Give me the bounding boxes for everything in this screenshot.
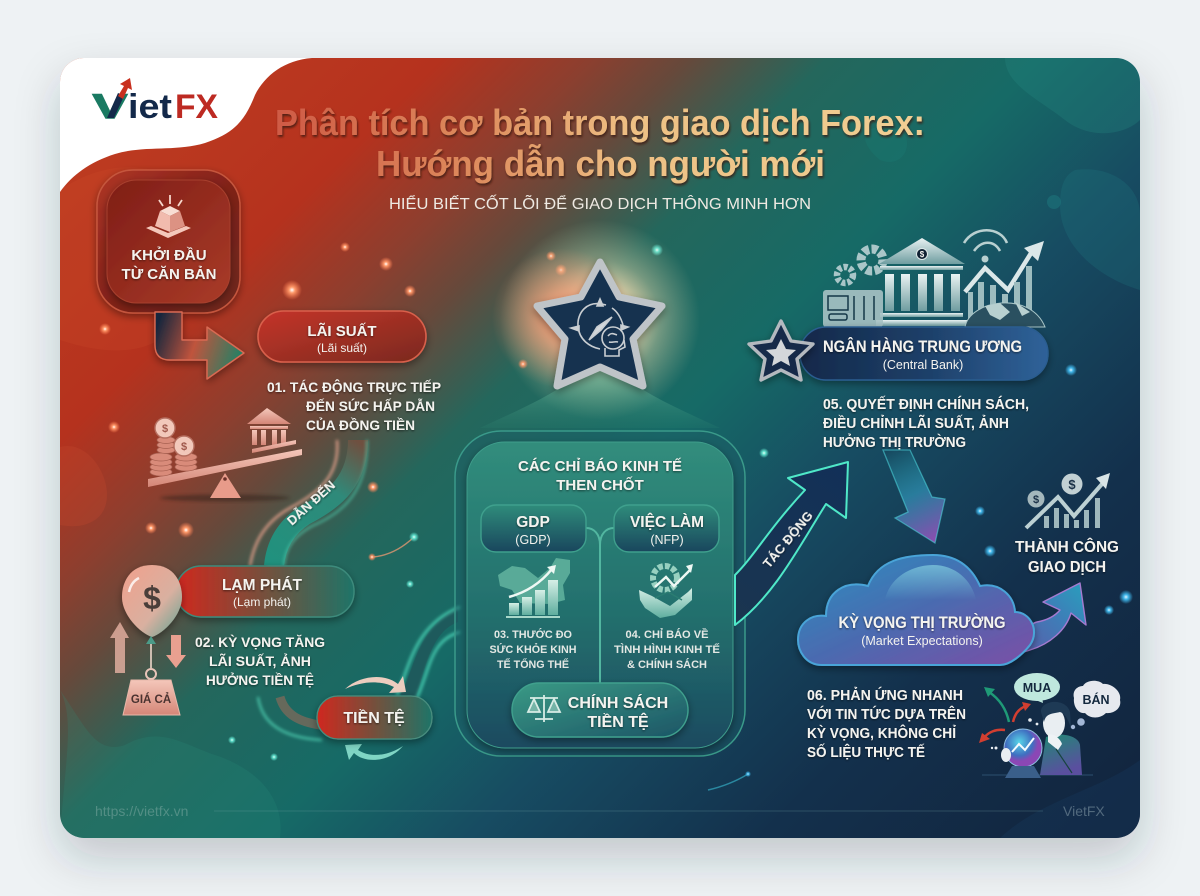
cloud: market expectations: (Market Expectations) (861, 634, 983, 648)
text: thành công giao dịch: GIAO DỊCH (1028, 559, 1106, 576)
pill: chính sách tiền tệ (512, 683, 688, 737)
icon: wifi (964, 230, 1007, 262)
icon: trading success chart (1026, 473, 1110, 528)
bubble: bán: BÁN (1082, 692, 1110, 707)
footer: divider (214, 810, 1043, 812)
icon: central bank, gears, chart, globe (823, 230, 1045, 327)
icon: central bank, gears, chart, globe: $ (920, 250, 925, 259)
text 02 (195, 633, 325, 688)
box: việc làm: (NFP) (650, 533, 684, 547)
icon: gears (837, 249, 883, 283)
text 03 (490, 628, 577, 671)
arrow: start to lãi suất (155, 312, 244, 379)
cloud: market expectations: KỲ VỌNG THỊ TRƯỜNG (838, 613, 1006, 632)
text 01 (267, 378, 441, 433)
title (275, 102, 925, 184)
star glow and cone (480, 220, 720, 428)
icon: seesaw with coins and bank (148, 408, 302, 502)
pill: tiền tệ (317, 696, 432, 739)
text 03: TẾ TỔNG THỂ (497, 658, 569, 671)
icon: balloon and weight: $ (143, 580, 161, 616)
text 02: HƯỞNG TIỀN TỆ (206, 671, 314, 688)
crystal ball (1004, 729, 1042, 767)
text 03: 03. THƯỚC ĐO (494, 628, 572, 641)
pill: ngân hàng trung ương: NGÂN HÀNG TRUNG ƯƠNG (823, 337, 1022, 356)
label (122, 246, 216, 283)
text 01: 01. TÁC ĐỘNG TRỰC TIẾP (267, 378, 441, 395)
illustration: trader with crystal ball (979, 673, 1120, 778)
box: GDP: (GDP) (515, 533, 551, 547)
text 01: CỦA ĐỒNG TIỀN (306, 416, 415, 433)
footer: brand: VietFX (1063, 803, 1105, 819)
icon: globe (965, 303, 1045, 327)
text 06: 06. PHẢN ỨNG NHANH (807, 686, 963, 704)
arrow: tác động (735, 462, 848, 625)
pill: chính sách tiền tệ: TIỀN TỆ (587, 712, 649, 731)
arrow: tác động: TÁC ĐỘNG (760, 508, 816, 571)
road: dẫn đến (250, 440, 367, 566)
text 05: HƯỞNG THỊ TRƯỜNG (823, 433, 966, 451)
logo background white blob (60, 58, 312, 192)
pill: lãi suất: (Lãi suất) (317, 341, 367, 355)
pill: ngân hàng trung ương (800, 327, 1048, 380)
curved arrows around tiền tệ (345, 676, 406, 760)
panel heading: THEN CHỐT (556, 476, 644, 494)
icon: gold bar (146, 195, 191, 238)
text 06: VỚI TIN TỨC DỰA TRÊN (807, 705, 966, 723)
logo: VietFX: FX (175, 88, 218, 126)
panel: key economic indicators (455, 431, 745, 756)
icon: central star with compass and brain (537, 262, 662, 386)
bubble: bán (1071, 681, 1120, 729)
icon: chart and arrow (965, 241, 1044, 322)
box: việc làm (614, 505, 719, 552)
pill: lạm phát: (Lạm phát) (233, 595, 291, 609)
hand arrows (989, 692, 1009, 722)
pill: ngân hàng trung ương: (Central Bank) (883, 358, 963, 372)
text 01: ĐẾN SỨC HẤP DẪN (306, 397, 435, 414)
page card shadow (60, 58, 1140, 838)
particles (99, 242, 1133, 790)
text 02: 02. KỲ VỌNG TĂNG (195, 633, 325, 650)
text: thành công giao dịch: THÀNH CÔNG (1015, 538, 1119, 556)
text 04: & CHÍNH SÁCH (627, 658, 707, 671)
icon: trading success chart: $ (1033, 494, 1039, 506)
icon: balloon and weight: GIÁ CẢ (131, 693, 171, 706)
label: TỪ CĂN BẢN (122, 265, 216, 283)
coins (150, 436, 197, 476)
background panel (60, 58, 1140, 838)
icon: seesaw with coins and bank: $ (162, 423, 168, 435)
text 02: LÃI SUẤT, ẢNH (209, 652, 311, 669)
text 06 (807, 686, 966, 761)
logo: VietFX (93, 78, 218, 126)
icon: trading success chart: $ (1068, 477, 1076, 492)
label: KHỞI ĐẦU (131, 246, 207, 264)
text 04: TÌNH HÌNH KINH TẾ (614, 643, 720, 656)
text 04: 04. CHỈ BÁO VỀ (626, 628, 708, 641)
connector lines (586, 528, 614, 683)
title: Phân tích cơ bản trong giao dịch Forex: (275, 102, 925, 143)
text 04 (614, 628, 720, 671)
icon: gear handshake (639, 564, 693, 618)
road: dẫn đến: DẪN ĐẾN (284, 477, 338, 528)
teal connectors: panel to tiền tệ (258, 607, 460, 740)
icon: scales (528, 695, 560, 722)
pill: chính sách tiền tệ: CHÍNH SÁCH (568, 693, 668, 712)
footer: url: https://vietfx.vn (95, 803, 188, 819)
panel heading (518, 458, 682, 494)
icon: seesaw with coins and bank: $ (181, 441, 187, 453)
icon: control panel (823, 290, 883, 327)
text 06: KỲ VỌNG, KHÔNG CHỈ (807, 724, 956, 742)
pill: tiền tệ: TIỀN TỆ (343, 708, 405, 727)
icon: small star (749, 321, 813, 380)
box: GDP (481, 505, 586, 552)
text 05 (823, 396, 1029, 451)
panel heading: CÁC CHỈ BÁO KINH TẾ (518, 458, 682, 475)
cloud: market expectations (798, 555, 1086, 665)
pill: lãi suất: LÃI SUẤT (307, 322, 377, 340)
text 03: SỨC KHỎE KINH (490, 643, 577, 656)
icon: balloon and weight (110, 565, 186, 715)
text 05: ĐIỀU CHỈNH LÃI SUẤT, ẢNH (823, 414, 1009, 432)
icon: map and rising bars (498, 558, 570, 618)
text 06: SỐ LIỆU THỰC TẾ (807, 743, 925, 761)
start box: khởi đầu từ căn bản (97, 170, 240, 313)
bubble: mua: MUA (1023, 681, 1051, 695)
text 05: 05. QUYẾT ĐỊNH CHÍNH SÁCH, (823, 396, 1029, 413)
pill: lạm phát (176, 566, 354, 617)
text: thành công giao dịch (1015, 538, 1119, 576)
bank (247, 408, 296, 453)
title: Hướng dẫn cho người mới (376, 143, 825, 184)
pill: lạm phát: LẠM PHÁT (222, 577, 303, 594)
logo: VietFX: V (93, 88, 127, 126)
person (1040, 735, 1082, 775)
box: việc làm: VIỆC LÀM (630, 513, 704, 531)
logo: VietFX: iet (128, 88, 172, 126)
bubble: mua (1014, 673, 1060, 703)
box: GDP: GDP (516, 514, 550, 531)
arrow: down to market expectations (883, 450, 945, 543)
subtitle: HIỂU BIẾT CỐT LÕI ĐỂ GIAO DỊCH THÔNG MINH HƠN (389, 193, 811, 213)
pill: lãi suất (258, 311, 426, 362)
